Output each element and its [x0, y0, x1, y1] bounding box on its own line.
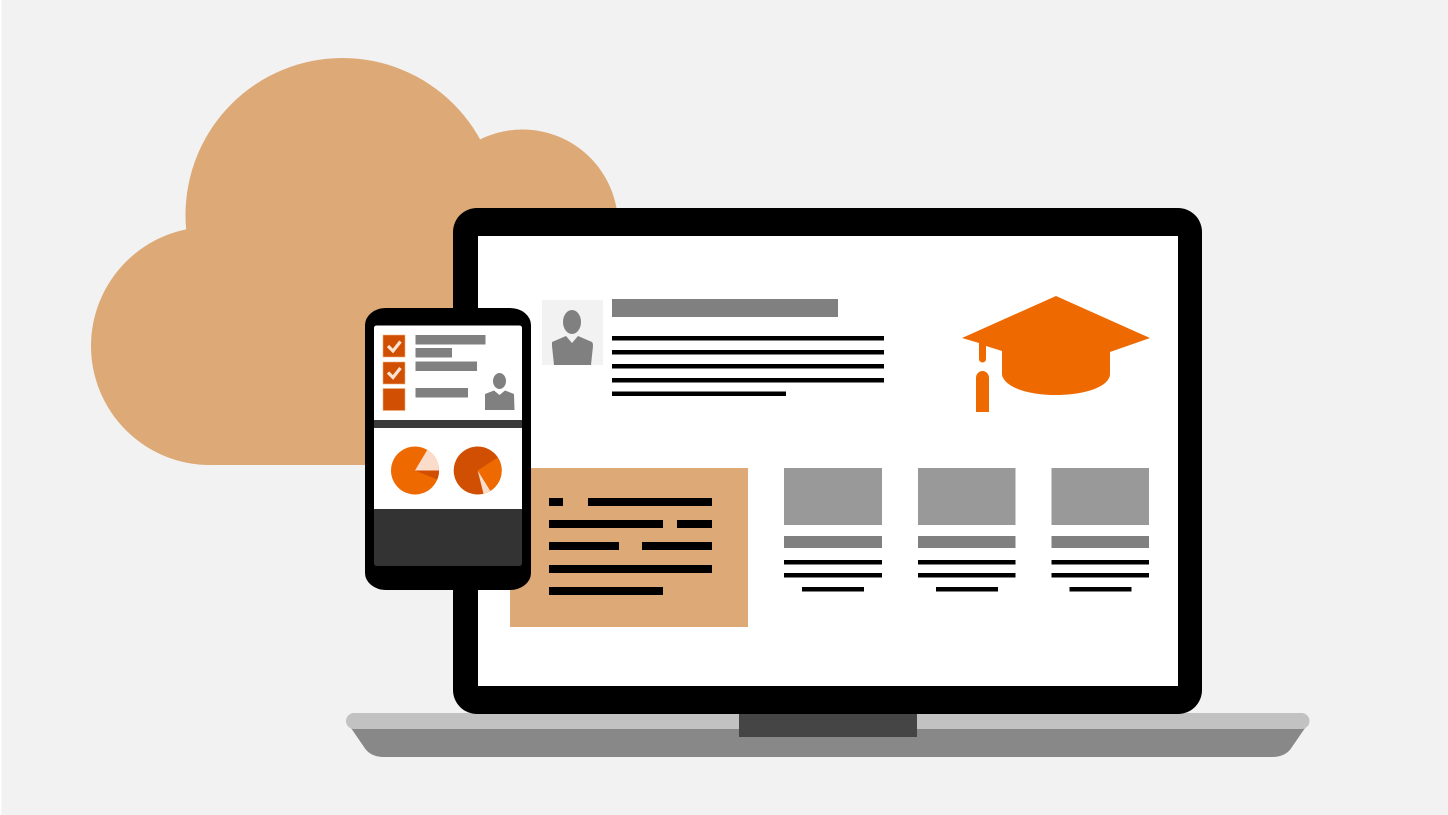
- phone user icon: [485, 373, 514, 410]
- cloud: [91, 58, 618, 465]
- checklist bars: [416, 335, 486, 398]
- phone bottom panel: [374, 509, 522, 566]
- checkbox 2: [383, 362, 405, 384]
- laptop screen: [453, 208, 1202, 714]
- article heading bar: [612, 299, 838, 317]
- checkbox 3: [383, 388, 405, 410]
- thumbnail card 2: [918, 468, 1016, 592]
- profile picture: [542, 300, 603, 365]
- phone: [365, 308, 531, 590]
- icon: graduation cap: [962, 296, 1150, 412]
- pie chart 1: [391, 446, 439, 494]
- thumbnail card 3: [1052, 468, 1149, 592]
- phone divider: [374, 420, 522, 428]
- laptop base: [346, 713, 1310, 757]
- article text lines: [612, 336, 884, 396]
- phone screen top panel: [374, 326, 522, 420]
- thumbnail card 1: [784, 468, 882, 592]
- phone chart panel: [374, 428, 522, 509]
- text card: [510, 468, 748, 627]
- pie chart 2: [454, 446, 502, 494]
- checkbox 1: [383, 335, 405, 357]
